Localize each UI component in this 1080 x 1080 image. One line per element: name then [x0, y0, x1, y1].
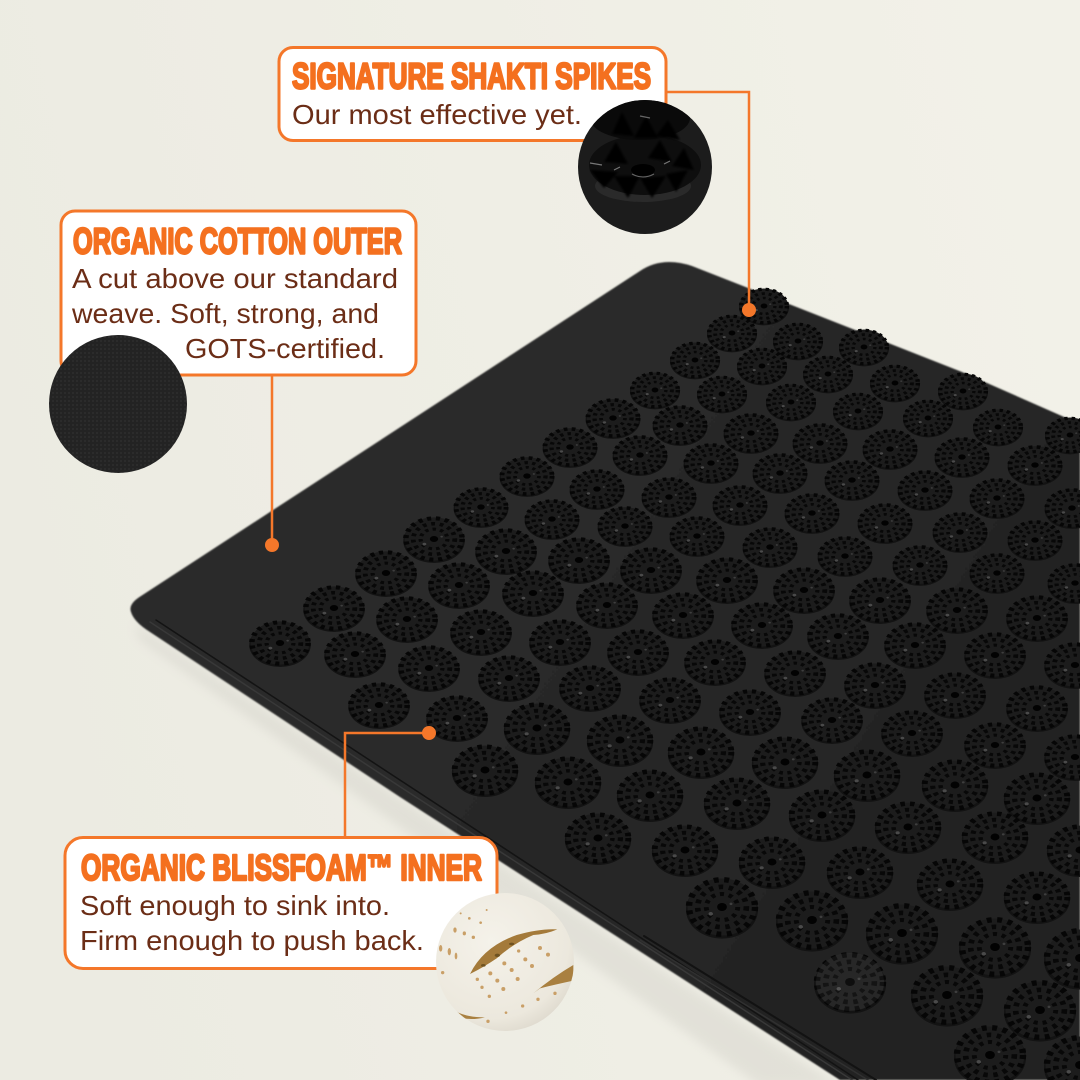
- acupressure mat: [130, 262, 1080, 1080]
- callout box: [61, 211, 416, 375]
- leader line: shakti spikes: [666, 92, 756, 317]
- body text: Our most effective yet.: [292, 99, 582, 130]
- icon: foam swatch: [436, 893, 574, 1031]
- leader line: cotton outer: [265, 375, 279, 552]
- callout box: [279, 48, 666, 140]
- body text: A cut above our standard: [72, 263, 398, 294]
- body text: GOTS-certified.: [185, 333, 385, 364]
- mat body: [130, 262, 1080, 1080]
- body text: [80, 890, 424, 956]
- mat side edge stripes: [150, 620, 876, 1080]
- heading: SIGNATURE SHAKTI SPIKES: [292, 56, 651, 96]
- heading: ORGANIC COTTON OUTER: [73, 220, 402, 262]
- icon: cotton weave swatch: [49, 335, 187, 473]
- callout: organic cotton outer: [61, 211, 416, 375]
- body text: [71, 263, 398, 364]
- callout box: [65, 838, 497, 968]
- icon: spike close-up photo: [578, 96, 712, 234]
- body text: Soft enough to sink into.: [80, 890, 390, 921]
- callout: signature shakti spikes: [279, 48, 666, 140]
- callout: organic blissfoam inner: [65, 838, 497, 968]
- body text: Firm enough to push back.: [80, 925, 424, 956]
- body text: weave. Soft, strong, and: [71, 298, 379, 329]
- mat soft edge shadow: [134, 624, 840, 1080]
- spike discs grid: [249, 289, 1080, 1080]
- leader line: blissfoam inner: [345, 726, 436, 837]
- heading: ORGANIC BLISSFOAM™ INNER: [81, 847, 482, 888]
